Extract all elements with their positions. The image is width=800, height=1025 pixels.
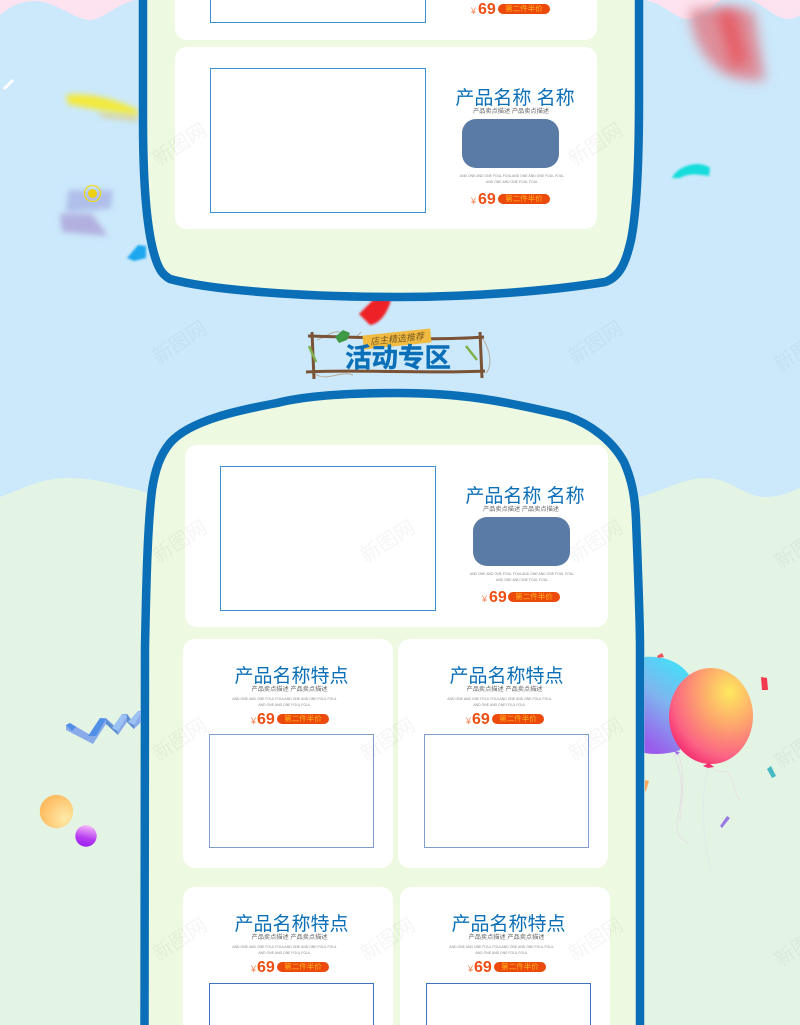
product info: AND ONE AND ONE FOUL FOUL xyxy=(258,951,311,955)
product info: 第二件半价 xyxy=(515,592,553,601)
watermarks: 新图网 xyxy=(149,119,211,171)
section heading: 活动专区 xyxy=(306,328,490,380)
product info: AND ONE AND ONE FOUL FOULAND ONE AND ONE FOUL FOUL xyxy=(449,945,554,949)
product info: ¥ xyxy=(251,716,256,726)
product info: ¥ xyxy=(482,594,487,604)
product info: 产品卖点描述 产品卖点描述 xyxy=(467,686,542,692)
card: product feature upper xyxy=(175,47,597,229)
product info: 产品名称特点 xyxy=(234,666,348,687)
product info: AND ONE AND ONE FOUL FOULAND ONE AND ONE FOUL FOUL xyxy=(447,697,552,701)
watermarks: 新图网 xyxy=(149,714,211,766)
product info xyxy=(465,486,585,606)
product info xyxy=(232,666,348,728)
bottom product frame xyxy=(144,393,640,1025)
product info: 69 xyxy=(474,959,492,976)
product image box xyxy=(220,466,436,611)
product image box xyxy=(210,0,426,23)
product info: AND ONE AND ONE FOUL FOULAND ONE AND ONE FOUL FOUL xyxy=(232,945,337,949)
product info xyxy=(455,88,575,208)
card: product grid 3 xyxy=(183,887,393,1025)
orange balloon xyxy=(669,668,753,768)
product info: 69 xyxy=(257,711,275,728)
product info: 产品卖点描述 产品卖点描述 xyxy=(469,934,544,940)
zigzag ribbon xyxy=(66,711,141,744)
product image box xyxy=(209,734,374,848)
product info: 产品卖点描述 产品卖点描述 xyxy=(252,934,327,940)
product image box xyxy=(426,983,591,1025)
watermarks: 新图网 xyxy=(149,317,211,369)
confetti: small pieces around balloons xyxy=(645,653,776,828)
watermarks: 新图网 xyxy=(149,914,211,966)
product image box xyxy=(210,68,426,213)
product info xyxy=(449,914,566,976)
product info: AND ONE AND ONE FOUL FOUL xyxy=(475,951,528,955)
watermarks: 新图网 xyxy=(565,119,627,171)
balloon strings xyxy=(674,754,741,870)
watermarks: 新图网 xyxy=(565,714,627,766)
product info: 产品名称 名称 xyxy=(455,88,575,109)
product info: 产品名称特点 xyxy=(234,914,348,935)
top product frame xyxy=(143,0,639,297)
price row: 69 xyxy=(478,1,496,18)
product info: ¥ xyxy=(251,964,256,974)
product info: 产品卖点描述 产品卖点描述 xyxy=(252,686,327,692)
icon: yellow target dot xyxy=(84,186,100,202)
watermarks: 新图网 xyxy=(565,914,627,966)
watermarks: 新图网 xyxy=(565,317,627,369)
pink top wave xyxy=(0,0,800,20)
product info: 69 xyxy=(478,191,496,208)
product info: AND ONE AND ONE FOUL FOULAND ONE AND ONE FOUL FOUL xyxy=(232,697,337,701)
product info: AND ONE AND ONE FOUL FOUL xyxy=(486,180,538,184)
product info xyxy=(447,666,564,728)
price row: ¥ xyxy=(471,6,476,16)
card: product grid 2 xyxy=(398,639,608,868)
card: top clipped product xyxy=(175,0,597,40)
product info: 产品卖点描述 产品卖点描述 xyxy=(473,108,549,114)
purple orb xyxy=(75,825,97,847)
price row: 第二件半价 xyxy=(505,4,543,13)
confetti: cyan xyxy=(672,164,710,178)
product info: 第二件半价 xyxy=(505,194,543,203)
product info: AND ONE AND ONE FOUL FOULAND ONE AND ONE FOUL FOUL xyxy=(460,174,564,178)
product info: ¥ xyxy=(471,196,476,206)
product info: 产品名称 名称 xyxy=(465,486,585,507)
product info: AND ONE AND ONE FOUL FOUL xyxy=(496,578,548,582)
wooden frame xyxy=(306,330,490,380)
confetti: lavender blur xyxy=(60,190,113,236)
heading text: 活动专区 xyxy=(345,343,451,373)
product info: 69 xyxy=(489,589,507,606)
product image box xyxy=(209,983,374,1025)
yellow banner xyxy=(362,328,432,350)
confetti: yellow blur xyxy=(66,94,138,122)
card: product grid 4 xyxy=(400,887,610,1025)
blue balloon xyxy=(644,657,696,754)
product info: AND ONE AND ONE FOUL FOULAND ONE AND ONE FOUL FOUL xyxy=(470,572,574,576)
product info: 产品名称特点 xyxy=(449,666,564,687)
product info: 第二件半价 xyxy=(501,962,539,971)
confetti: red blur top right xyxy=(690,7,765,80)
watermarks: 新图网 xyxy=(149,516,211,568)
product info: AND ONE AND ONE FOUL FOUL xyxy=(473,703,526,707)
product info: ¥ xyxy=(466,716,471,726)
product image box xyxy=(424,734,589,848)
orange orb xyxy=(40,795,73,828)
green lower background wave xyxy=(0,478,800,1025)
confetti: white dash xyxy=(4,80,13,89)
product info: 产品卖点描述 产品卖点描述 xyxy=(483,506,559,512)
price row xyxy=(471,1,550,18)
product info: 产品名称特点 xyxy=(451,914,566,935)
card: product grid 1 xyxy=(183,639,393,868)
yellow banner: 店主精选推荐 xyxy=(370,331,424,347)
watermarks: 新图网 xyxy=(357,714,419,766)
product info xyxy=(232,914,348,976)
confetti: blue xyxy=(127,245,146,261)
product info: 第二件半价 xyxy=(284,962,322,971)
card: product feature lower xyxy=(185,445,608,627)
watermarks: 新图网 xyxy=(357,516,419,568)
product info: ¥ xyxy=(468,964,473,974)
product info: 69 xyxy=(257,959,275,976)
watermarks: 新图网 xyxy=(565,516,627,568)
confetti: red under frame xyxy=(359,298,391,325)
product info: 69 xyxy=(472,711,490,728)
product info: 第二件半价 xyxy=(499,714,537,723)
product info: AND ONE AND ONE FOUL FOUL xyxy=(258,703,311,707)
watermarks: 新图网 xyxy=(357,914,419,966)
product info: 第二件半价 xyxy=(284,714,322,723)
